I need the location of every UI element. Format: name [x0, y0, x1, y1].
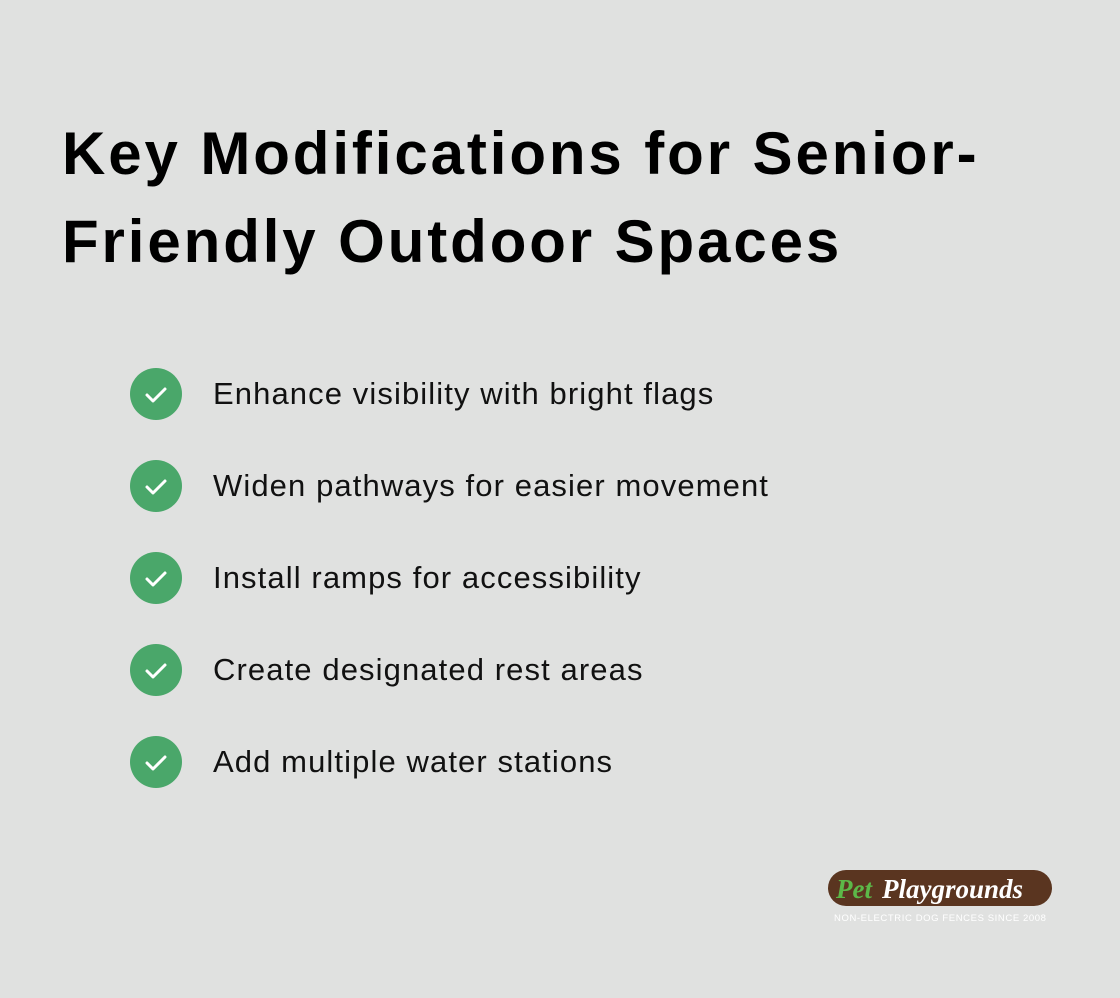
item 4: Create designated rest areas: [213, 652, 644, 687]
title: Key Modifications for Senior-: [62, 120, 980, 187]
item 5: Add multiple water stations: [213, 744, 613, 779]
item 3: [130, 552, 642, 604]
logo: NON-ELECTRIC DOG FENCES SINCE 2008: [834, 913, 1047, 924]
logo: Pet: [835, 874, 873, 904]
logo: Playgrounds: [881, 874, 1023, 904]
item 5: [130, 736, 613, 788]
item 1: [130, 368, 714, 420]
logo: [828, 870, 1052, 924]
item 3: Install ramps for accessibility: [213, 560, 642, 595]
item 2: Widen pathways for easier movement: [213, 468, 769, 503]
checklist: [130, 368, 769, 788]
item 2: [130, 460, 769, 512]
item 4: [130, 644, 644, 696]
item 1: Enhance visibility with bright flags: [213, 376, 714, 411]
title: [62, 120, 980, 275]
title: Friendly Outdoor Spaces: [62, 208, 842, 275]
